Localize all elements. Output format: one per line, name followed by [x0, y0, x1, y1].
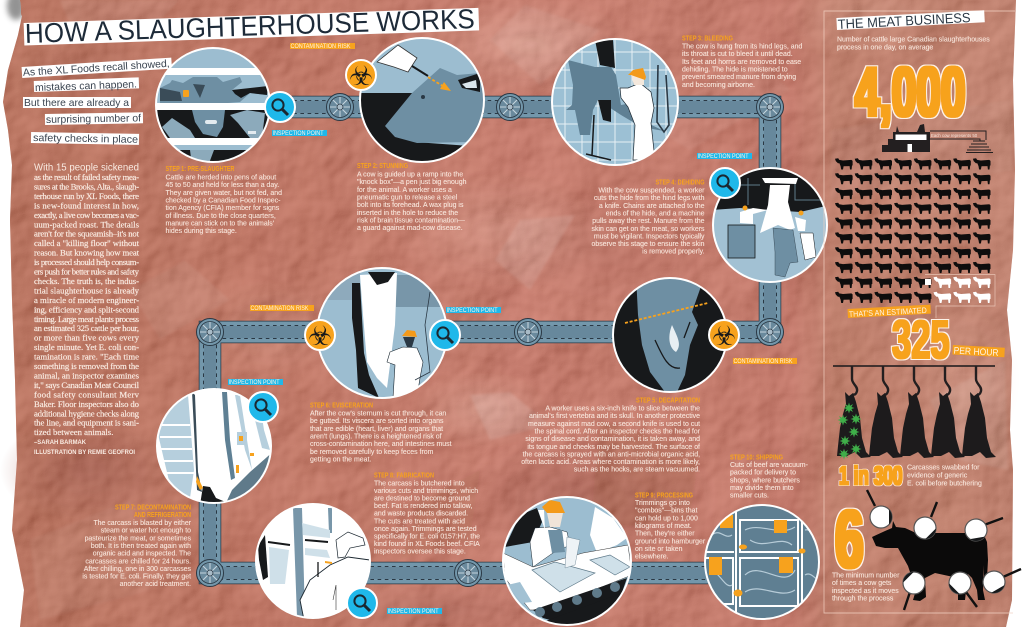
step 4 text: a knife. Chains are attached to the	[599, 203, 705, 210]
step 1 text: checked by a Canadian Food Inspec-	[166, 197, 280, 204]
step 2 text: inserted in the hole to reduce the	[357, 210, 458, 217]
step 6 text: be gutted. Its viscera are sorted into organs	[310, 418, 444, 425]
step 1 text: tion Agency (CFIA) member for signs	[166, 205, 280, 212]
title: HOW A SLAUGHTERHOUSE WORKS	[24, 3, 475, 49]
big number 6: 6	[835, 493, 864, 585]
intro article column: or more than five cows every	[34, 333, 140, 343]
step 6 text	[310, 400, 452, 463]
intro article column: called a "killing floor" without	[34, 238, 140, 248]
intro article column: ers push for better rules and safety	[34, 266, 140, 276]
step 2 text: risk of brain tissue contamination—	[357, 217, 465, 224]
step 4 text: is removed properly.	[642, 249, 705, 256]
intro article column: timing. Large meat plants process	[34, 314, 140, 324]
step 7 text: AND REFRIGERATION	[134, 510, 191, 519]
step 2 text: "knock box"—a pen just big enough	[357, 179, 467, 186]
intro article column: –SARAH BARMAK	[34, 439, 86, 446]
step 5 text: the spinal cord. After an inspector checks the head for	[535, 428, 701, 435]
step 1 text: They are given water, but not fed, and	[166, 190, 282, 197]
step 7 text: pasteurize the meat, or sometimes	[85, 535, 192, 542]
step 7 text: is tested for E. coli. Finally, they get	[82, 574, 191, 581]
illustration: step 3 bleeding	[553, 40, 677, 164]
step 9 text	[635, 490, 706, 561]
subheading strips	[22, 58, 172, 146]
inspection point labels: INSPECTION POINT	[698, 154, 749, 160]
intro article column: Baker. Floor inspectors also do	[34, 399, 140, 409]
step 10 text: Cuts of beef are vacuum-	[730, 462, 808, 469]
step 10 text	[730, 452, 808, 500]
step 9 text: STEP 9: PROCESSING	[635, 490, 693, 500]
step 8 text: are destined to become ground	[374, 496, 470, 503]
step 4 text: cuts the hide from the hind legs with	[594, 195, 705, 202]
cow pictogram grid	[835, 158, 995, 318]
intro article column: is processed should help consum-	[34, 257, 139, 267]
step 4 text: ends of the hide, and a machine	[606, 210, 705, 217]
step 1 text: manure can stick on to the animals'	[166, 220, 274, 227]
inspection point labels: INSPECTION POINT	[272, 131, 324, 137]
circle outline step 8	[256, 504, 370, 618]
conveyor belt	[196, 94, 784, 586]
step 4 text: With the cow suspended, a worker	[598, 188, 705, 194]
step 10 text: packed for delivery to	[730, 470, 796, 477]
step 8 text: once again. Trimmings are tested	[374, 526, 477, 533]
subheading strips: safety checks in place	[33, 133, 138, 146]
illustration: step 10 shipping	[706, 506, 818, 618]
step 3 text: and becoming airborne.	[682, 82, 755, 89]
step 5 text: often lactic acid. Areas where contamination is more likely,	[521, 459, 700, 466]
step 7 text: another acid treatment.	[120, 581, 191, 588]
hanging carcasses chart	[833, 365, 996, 460]
step 3 text: prevent smeared manure from drying	[682, 74, 796, 81]
circle outline step 10	[705, 505, 819, 619]
step 9 text: ground into hamburger	[635, 538, 706, 545]
step 8 text: and waste products discarded.	[374, 511, 468, 518]
step 1 text: STEP 1: PRE-SLAUGHTER	[166, 164, 235, 173]
circle outline step 9	[503, 497, 631, 625]
step 5 text: signs of disease and contamination, it is taken away, and	[525, 436, 700, 443]
1 in 300 caption: E. coli before butchering	[907, 480, 982, 488]
step 7 text	[82, 502, 192, 588]
illustration: step 2 stunning	[361, 39, 483, 161]
intro article column: checks. The truth is, the indus-	[34, 276, 139, 286]
circle outline step 4	[713, 168, 827, 282]
circle outline step 6	[317, 268, 447, 398]
intro article column: an estimated 325 cattle per hour,	[34, 323, 139, 333]
step 6 text: STEP 6: EVISCERATION	[310, 400, 373, 410]
step 4 text: skin can get on the meat, so workers	[592, 226, 705, 233]
step 8 text: The cuts are treated with acid	[374, 518, 465, 525]
step 3 text: Its feet and horns are removed to ease	[682, 59, 801, 66]
step 8 text: various cuts and trimmings, which	[374, 488, 478, 495]
step 6 text: aren't (lungs). There is a heightened risk of	[310, 433, 442, 440]
step 9 text: kilograms of meat.	[635, 523, 692, 530]
step 8 text: inspectors oversee this stage.	[374, 548, 466, 555]
intro article column: something is removed from the	[34, 361, 139, 371]
step 9 text: "combos"—bins that	[635, 508, 697, 515]
big number 325: 325	[892, 309, 950, 370]
step 10 text: shops, where butchers	[730, 477, 800, 484]
intro article column: reason. But knowing how meat	[34, 248, 140, 258]
step 9 text: can hold up to 1,000	[635, 515, 698, 522]
step 7 text: The carcass is blasted by either	[93, 520, 192, 527]
panel heading: THE MEAT BUSINESS	[837, 10, 971, 32]
step 3 text	[682, 34, 802, 89]
step 7 text: carcasses are chilled for 24 hours.	[85, 558, 191, 565]
circle outline step 7	[157, 389, 271, 503]
step 5 text: STEP 5: DECAPITATION	[636, 396, 700, 404]
step 7 text: STEP 7: DECONTAMINATION	[115, 502, 191, 512]
step 10 text: STEP 10: SHIPPING	[730, 452, 783, 462]
step 9 text: Then, they're either	[635, 531, 695, 538]
step 6 text: After the cow's sternum is cut through, it can	[310, 410, 446, 418]
illustration: step 6 evisceration	[320, 269, 444, 397]
step 6 text: cross-contamination here, and intestines must	[310, 441, 452, 448]
step 10 text: smaller cuts.	[730, 493, 769, 500]
step 4 text: observe this stage to ensure the skin	[592, 241, 705, 248]
intro article column: the line, and equipment is sani-	[34, 418, 139, 428]
step 5 text: animal's first vertebra and its skull. In another protective	[529, 413, 700, 420]
subheading strips: But there are already a	[24, 98, 129, 109]
intro article column: trial slaughterhouse is already	[34, 285, 140, 295]
panel: the meat business	[824, 9, 1021, 613]
step 5 text	[521, 396, 701, 474]
inspection point labels	[228, 130, 752, 615]
intro article column: exactly, a live cow becomes a vac-	[34, 210, 139, 220]
illustration: step 4 dehiding	[714, 169, 826, 281]
step 1 text	[166, 164, 282, 235]
inspection point icons	[248, 92, 740, 618]
intro article column: a miracle of modern engineer-	[34, 295, 139, 305]
inspection point labels: INSPECTION POINT	[228, 380, 280, 386]
contamination risk labels: CONTAMINATION RISK	[734, 359, 792, 365]
step 8 text: kind found in XL Foods beef. CFIA	[374, 541, 480, 548]
step 5 text: the carcass is sprayed with an anti-microbial organic acid,	[523, 451, 700, 458]
contamination risk labels	[250, 43, 797, 365]
illustration: step 9 processing	[504, 498, 630, 624]
big stat 1 in 300: 1 in 300	[839, 461, 903, 490]
6 caption: through the process	[832, 596, 894, 603]
6 caption: of times a cow gets	[832, 580, 892, 587]
contamination risk labels: CONTAMINATION RISK	[250, 306, 308, 312]
step 7 text: organic acid and inspected. The	[93, 551, 191, 558]
intro article column: it," says Canadian Meat Council	[34, 380, 140, 390]
step 3 text: STEP 3: BLEEDING	[682, 34, 733, 42]
contamination risk icons: ☣	[712, 321, 736, 352]
step 4 text	[592, 178, 705, 256]
intro article column: tized between animals.	[34, 427, 113, 437]
circle outline step 5	[613, 278, 727, 392]
slaughterhouse icon: Each cow represents 50	[931, 133, 978, 138]
intro article column: ing, efficiency and split-second	[34, 304, 140, 314]
step 8 text: beef. Fat is rendered into tallow,	[374, 503, 472, 510]
step 5 text: such as the hocks, are steam vacuumed.	[574, 467, 700, 474]
intro article column: animal, an inspector examines	[34, 370, 140, 380]
intro article column: tamination is rare. "Each time	[34, 352, 139, 362]
step 2 text	[357, 161, 467, 232]
step 1 text: hides during this stage.	[166, 228, 237, 235]
intro article column: single minute. Yet E. coli con-	[34, 342, 139, 352]
step 9 text: Trimmings go into	[635, 500, 690, 507]
6 caption: inspected as it moves	[832, 588, 899, 595]
step 2 text: STEP 2: STUNNING	[357, 161, 408, 170]
step 7 text: steam or water hot enough to	[101, 528, 191, 535]
circle outline step 1	[156, 48, 270, 162]
1 in 300 caption: Carcasses swabbed for	[907, 464, 980, 472]
step 6 text: that are edible (heart, liver) and organs that	[310, 426, 443, 433]
intro article column: terhouse run by XL Foods, there	[34, 191, 139, 201]
step 4 text: pulls away the rest. Manure from the	[592, 218, 705, 225]
intro article column: ILLUSTRATION BY REMIE GEOFROI	[34, 449, 135, 456]
per hour label: PER HOUR	[953, 346, 999, 359]
contamination risk labels: CONTAMINATION RISK	[290, 44, 350, 50]
inspection point labels: INSPECTION POINT	[388, 609, 439, 615]
illustration: step 7 decontamination	[158, 390, 270, 502]
subheading strips: As the XL Foods recall showed,	[23, 59, 170, 79]
step 7 text: both. It is then treated again with	[91, 543, 191, 550]
subheading strips: surprising number of	[46, 113, 141, 126]
step 5 text: A worker uses a six-inch knife to slice between the	[545, 406, 700, 412]
1 in 300 caption: evidence of generic	[907, 472, 968, 480]
step 5 text: its tongue and cheeks may be harvested. The surface of	[527, 444, 700, 451]
intro article column: is new-found interest in how,	[34, 200, 139, 210]
subheading strips: mistakes can happen.	[35, 79, 137, 94]
illustration: step 8 fabrication	[257, 505, 369, 617]
step 6 text: be removed carefully to keep feces from	[310, 449, 434, 456]
step 2 text: bolt into its forehead. A wax plug is	[357, 202, 464, 209]
step 9 text: elsewhere.	[635, 554, 669, 561]
intro article column: additional hygiene checks along	[34, 408, 140, 418]
intro article column: uum-packed roast. The details	[34, 219, 140, 229]
step 1 text: of illness. Due to the close quarters,	[166, 213, 276, 220]
step 8 text	[374, 470, 480, 555]
contamination risk icons: ☣	[308, 321, 332, 352]
inspected cow graphic	[867, 490, 1021, 610]
step 8 text: The carcass is butchered into	[374, 480, 465, 488]
step 3 text: its throat is cut to bleed it until dead.	[682, 51, 793, 58]
step 9 text: on site or taken	[635, 546, 683, 553]
step 5 text: measure against mad cow, a second knife is used to cut	[528, 421, 700, 428]
step 2 text: A cow is guided up a ramp into the	[357, 172, 463, 178]
step 4 text: STEP 4: DEHIDING	[656, 178, 705, 186]
circle outline step 2	[360, 38, 484, 162]
step 2 text: a guard against mad-cow disease.	[357, 225, 463, 232]
step 6 text: getting on the meat.	[310, 456, 371, 463]
intro article column: food safety consultant Merv	[34, 389, 140, 399]
intro article column: as the result of failed safety mea-	[34, 172, 139, 182]
step 2 text: pneumatic gun to release a steel	[357, 194, 458, 201]
illustration: step 1 cattle in pens	[157, 49, 268, 161]
6 caption: The minimum number	[832, 572, 900, 580]
step 8 text: specifically for E. coli 0157:H7, the	[374, 533, 480, 540]
intro article column: aren't for the squeamish–it's not	[34, 229, 140, 239]
illustration: step 5 decapitation	[614, 279, 724, 391]
step 2 text: for the animal. A worker uses a	[357, 187, 452, 194]
intro article column: sures at the Brooks, Alta., slaugh-	[34, 181, 139, 191]
big number 4,000: 4,000	[855, 54, 965, 132]
circle outline step 3	[552, 39, 678, 165]
contamination risk icons: ☣	[349, 61, 373, 92]
step 1 text: 45 to 50 and held for less than a day.	[166, 182, 279, 189]
step 10 text: may divide them into	[730, 485, 794, 492]
step 8 text: STEP 8: FABRICATION	[374, 470, 434, 480]
step 4 text: must be vigilant. Inspectors typically	[594, 233, 705, 240]
step 3 text: dehiding. The hide is moistened to	[682, 66, 788, 73]
daily cattle description: Number of cattle large Canadian slaughterhouses	[837, 36, 990, 44]
intro article column: With 15 people sickened	[34, 162, 139, 174]
slaughterhouse icon	[882, 124, 993, 152]
that's an estimated label: THAT'S AN ESTIMATED	[849, 306, 927, 319]
step 7 text: After chilling, one in 300 carcasses	[84, 566, 192, 573]
inspection point labels: INSPECTION POINT	[446, 308, 498, 314]
step 1 text: Cattle are herded into pens of about	[166, 174, 276, 182]
daily cattle description: process in one day, on average	[837, 44, 933, 52]
step 3 text: The cow is hung from its hind legs, and	[682, 44, 802, 50]
intro article column	[34, 162, 140, 456]
contamination risk icons	[305, 60, 739, 352]
